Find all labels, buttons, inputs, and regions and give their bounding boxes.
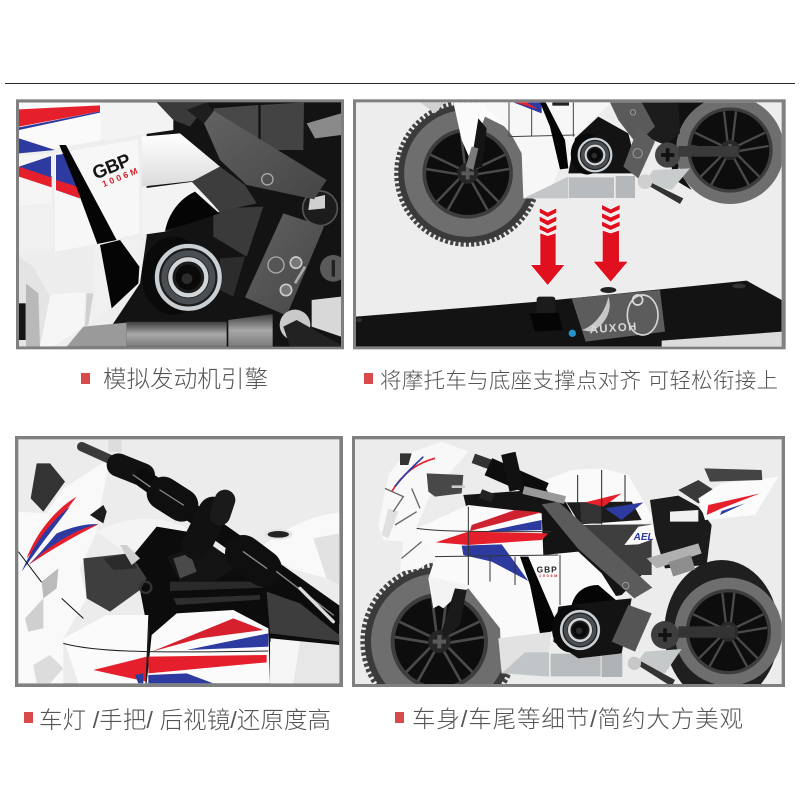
display base: [356, 281, 782, 347]
arrow: red down arrow left: [531, 208, 564, 285]
plate logo: AUXOH: [589, 321, 637, 336]
panel: full motorcycle side view: [352, 436, 785, 687]
caption: lights, grips, mirrors: 车灯 /手把/ 后视镜/还原度高: [39, 707, 331, 733]
motorcycle: [360, 442, 782, 684]
caption: engine: 模拟发动机引擎: [103, 366, 268, 392]
caption: align with the base: 将摩托车与底座支撑点对齐 可轻松衔接上: [380, 369, 778, 393]
motorcycle: AEL: [633, 532, 654, 543]
panel: motorcycle aligned to the base: [353, 96, 786, 349]
arrow: red down arrow right: [594, 205, 628, 282]
panel: headlight and handlebar: [15, 436, 343, 687]
motorcycle: GBP: [537, 564, 557, 574]
photo: fairing, tank and handlebar: [18, 458, 339, 683]
logo: GBP 1006: 1006M: [101, 166, 139, 189]
top divider line: [5, 83, 795, 84]
motorcycle lower half: [396, 96, 784, 245]
mirror and handlebar: [427, 453, 565, 500]
photo: white fairing, grey brackets and exhaust: [19, 102, 347, 347]
caption: body and tail details: 车身/车尾等细节/简约大方美观: [412, 706, 743, 732]
logo: GBP 1006: GBP: [89, 149, 134, 183]
plate logo: [582, 295, 658, 336]
panel: simulated engine close-up: [16, 99, 347, 349]
logo: GBP 1006: [93, 154, 138, 187]
handlebar: [82, 440, 337, 622]
motorcycle: 1006M: [539, 574, 557, 578]
